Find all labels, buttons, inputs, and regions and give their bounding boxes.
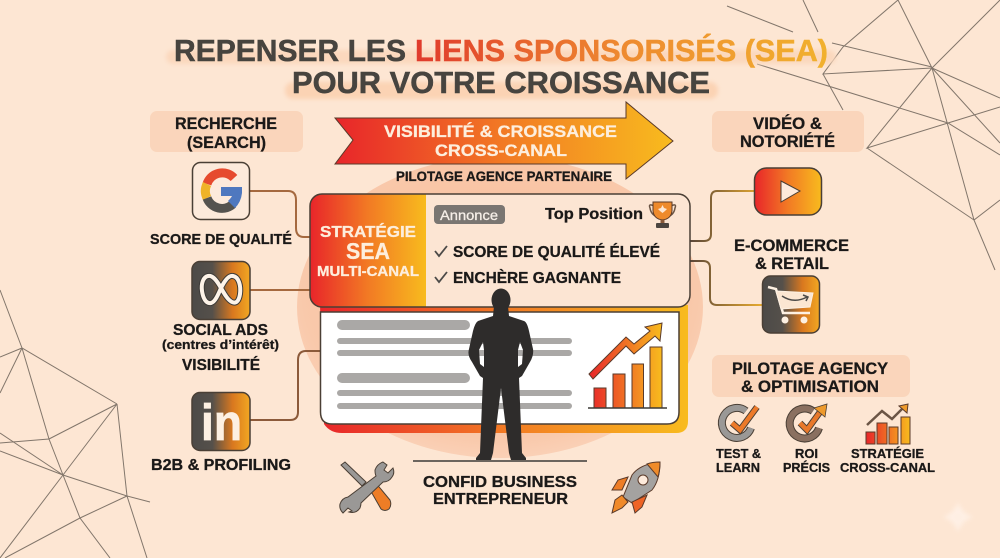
arrow: visibilité & croissance: CROSS-CANAL — [435, 141, 567, 160]
label: confid business entrepreneur — [423, 474, 577, 508]
label: confid business entrepreneur: ENTREPRENEUR — [433, 491, 568, 508]
connector: google to strategy — [250, 191, 311, 237]
strategy label: MULTI-CANAL — [317, 264, 419, 280]
panel: recherche heading: (SEARCH) — [187, 134, 266, 152]
panel: recherche heading: RECHERCHE — [175, 115, 277, 133]
label: confid business entrepreneur: CONFID BUSINESS — [423, 474, 577, 491]
label: test & learn: LEARN — [716, 460, 760, 475]
arrow: visibilité & croissance: VISIBILITÉ & CROISSANCE — [384, 122, 617, 141]
panel: recherche heading — [150, 111, 303, 152]
panel: pilotage agency heading — [712, 355, 910, 397]
panel: pilotage agency heading: & OPTIMISATION — [741, 378, 879, 396]
label: e-commerce & retail: E-COMMERCE — [734, 237, 849, 255]
icon: tools — [340, 462, 394, 513]
title: REPENSER LES — [174, 33, 406, 68]
title — [166, 33, 836, 100]
icon: amazon cart — [762, 276, 820, 333]
label: e-commerce & retail: & RETAIL — [755, 255, 829, 273]
background halo — [297, 156, 703, 458]
icon: trophy — [650, 202, 676, 228]
person silhouette — [468, 288, 533, 460]
panel: vidéo heading — [712, 111, 864, 152]
check: score: SCORE DE QUALITÉ ÉLEVÉ — [453, 242, 660, 261]
annonce badge: Annonce — [440, 207, 498, 223]
label: roi précis — [783, 446, 830, 475]
label: roi précis: PRÉCIS — [783, 460, 830, 475]
label: e-commerce & retail — [734, 237, 849, 273]
top position: Top Position — [545, 206, 643, 223]
panel: vidéo heading: NOTORIÉTÉ — [740, 132, 835, 151]
label: b2b & profiling: B2B & PROFILING — [151, 457, 291, 474]
ground line — [413, 460, 587, 462]
connector: amazon to card — [689, 261, 762, 305]
label: pilotage agence partenaire: PILOTAGE AGENCE PARTENAIRE — [396, 168, 612, 184]
decorative sparkle — [943, 502, 973, 532]
icon: meta — [192, 262, 250, 320]
panel: pilotage agency heading: PILOTAGE AGENCY — [732, 360, 888, 378]
icon: stratégie chart — [866, 404, 910, 444]
icon: roi précis — [790, 404, 827, 438]
icon: test & learn — [722, 407, 757, 438]
label: stratégie cross-canal — [840, 446, 935, 475]
label: score de qualité: SCORE DE QUALITÉ — [150, 231, 292, 248]
arrow: visibilité & croissance — [335, 102, 673, 179]
text placeholder bars — [337, 320, 572, 409]
icon: linkedin: in — [201, 394, 242, 451]
panel: strategy card — [310, 194, 690, 307]
label: social ads: SOCIAL ADS — [173, 322, 268, 339]
label: test & learn — [716, 446, 761, 475]
connector: meta to strategy — [250, 289, 311, 291]
strategy label — [317, 222, 419, 280]
label: social ads: (centres d’intérêt) — [162, 337, 279, 352]
title: POUR VOTRE CROISSANCE — [292, 65, 710, 100]
label: test & learn: TEST & — [716, 446, 761, 461]
panel: vidéo heading: VIDÉO & — [753, 114, 822, 133]
icon: rocket — [612, 462, 660, 513]
panel: lower ad panel — [320, 305, 688, 433]
label: social ads: VISIBILITÉ — [182, 357, 260, 374]
connector: linkedin to panel — [250, 351, 321, 420]
title: LIENS SPONSORISÉS (SEA) — [415, 33, 828, 68]
strategy label: SEA — [346, 238, 390, 264]
check: enchère: ENCHÈRE GAGNANTE — [453, 268, 621, 287]
icon: google — [192, 162, 250, 220]
connector: youtube to card — [689, 191, 754, 241]
strategy label: STRATÉGIE — [320, 222, 416, 241]
icon: youtube — [754, 168, 822, 215]
label: stratégie cross-canal: STRATÉGIE — [851, 446, 924, 461]
annonce badge — [434, 205, 505, 224]
growth chart — [588, 323, 667, 408]
label: stratégie cross-canal: CROSS-CANAL — [840, 460, 935, 475]
label: roi précis: ROI — [795, 446, 818, 461]
label: social ads — [162, 322, 279, 374]
